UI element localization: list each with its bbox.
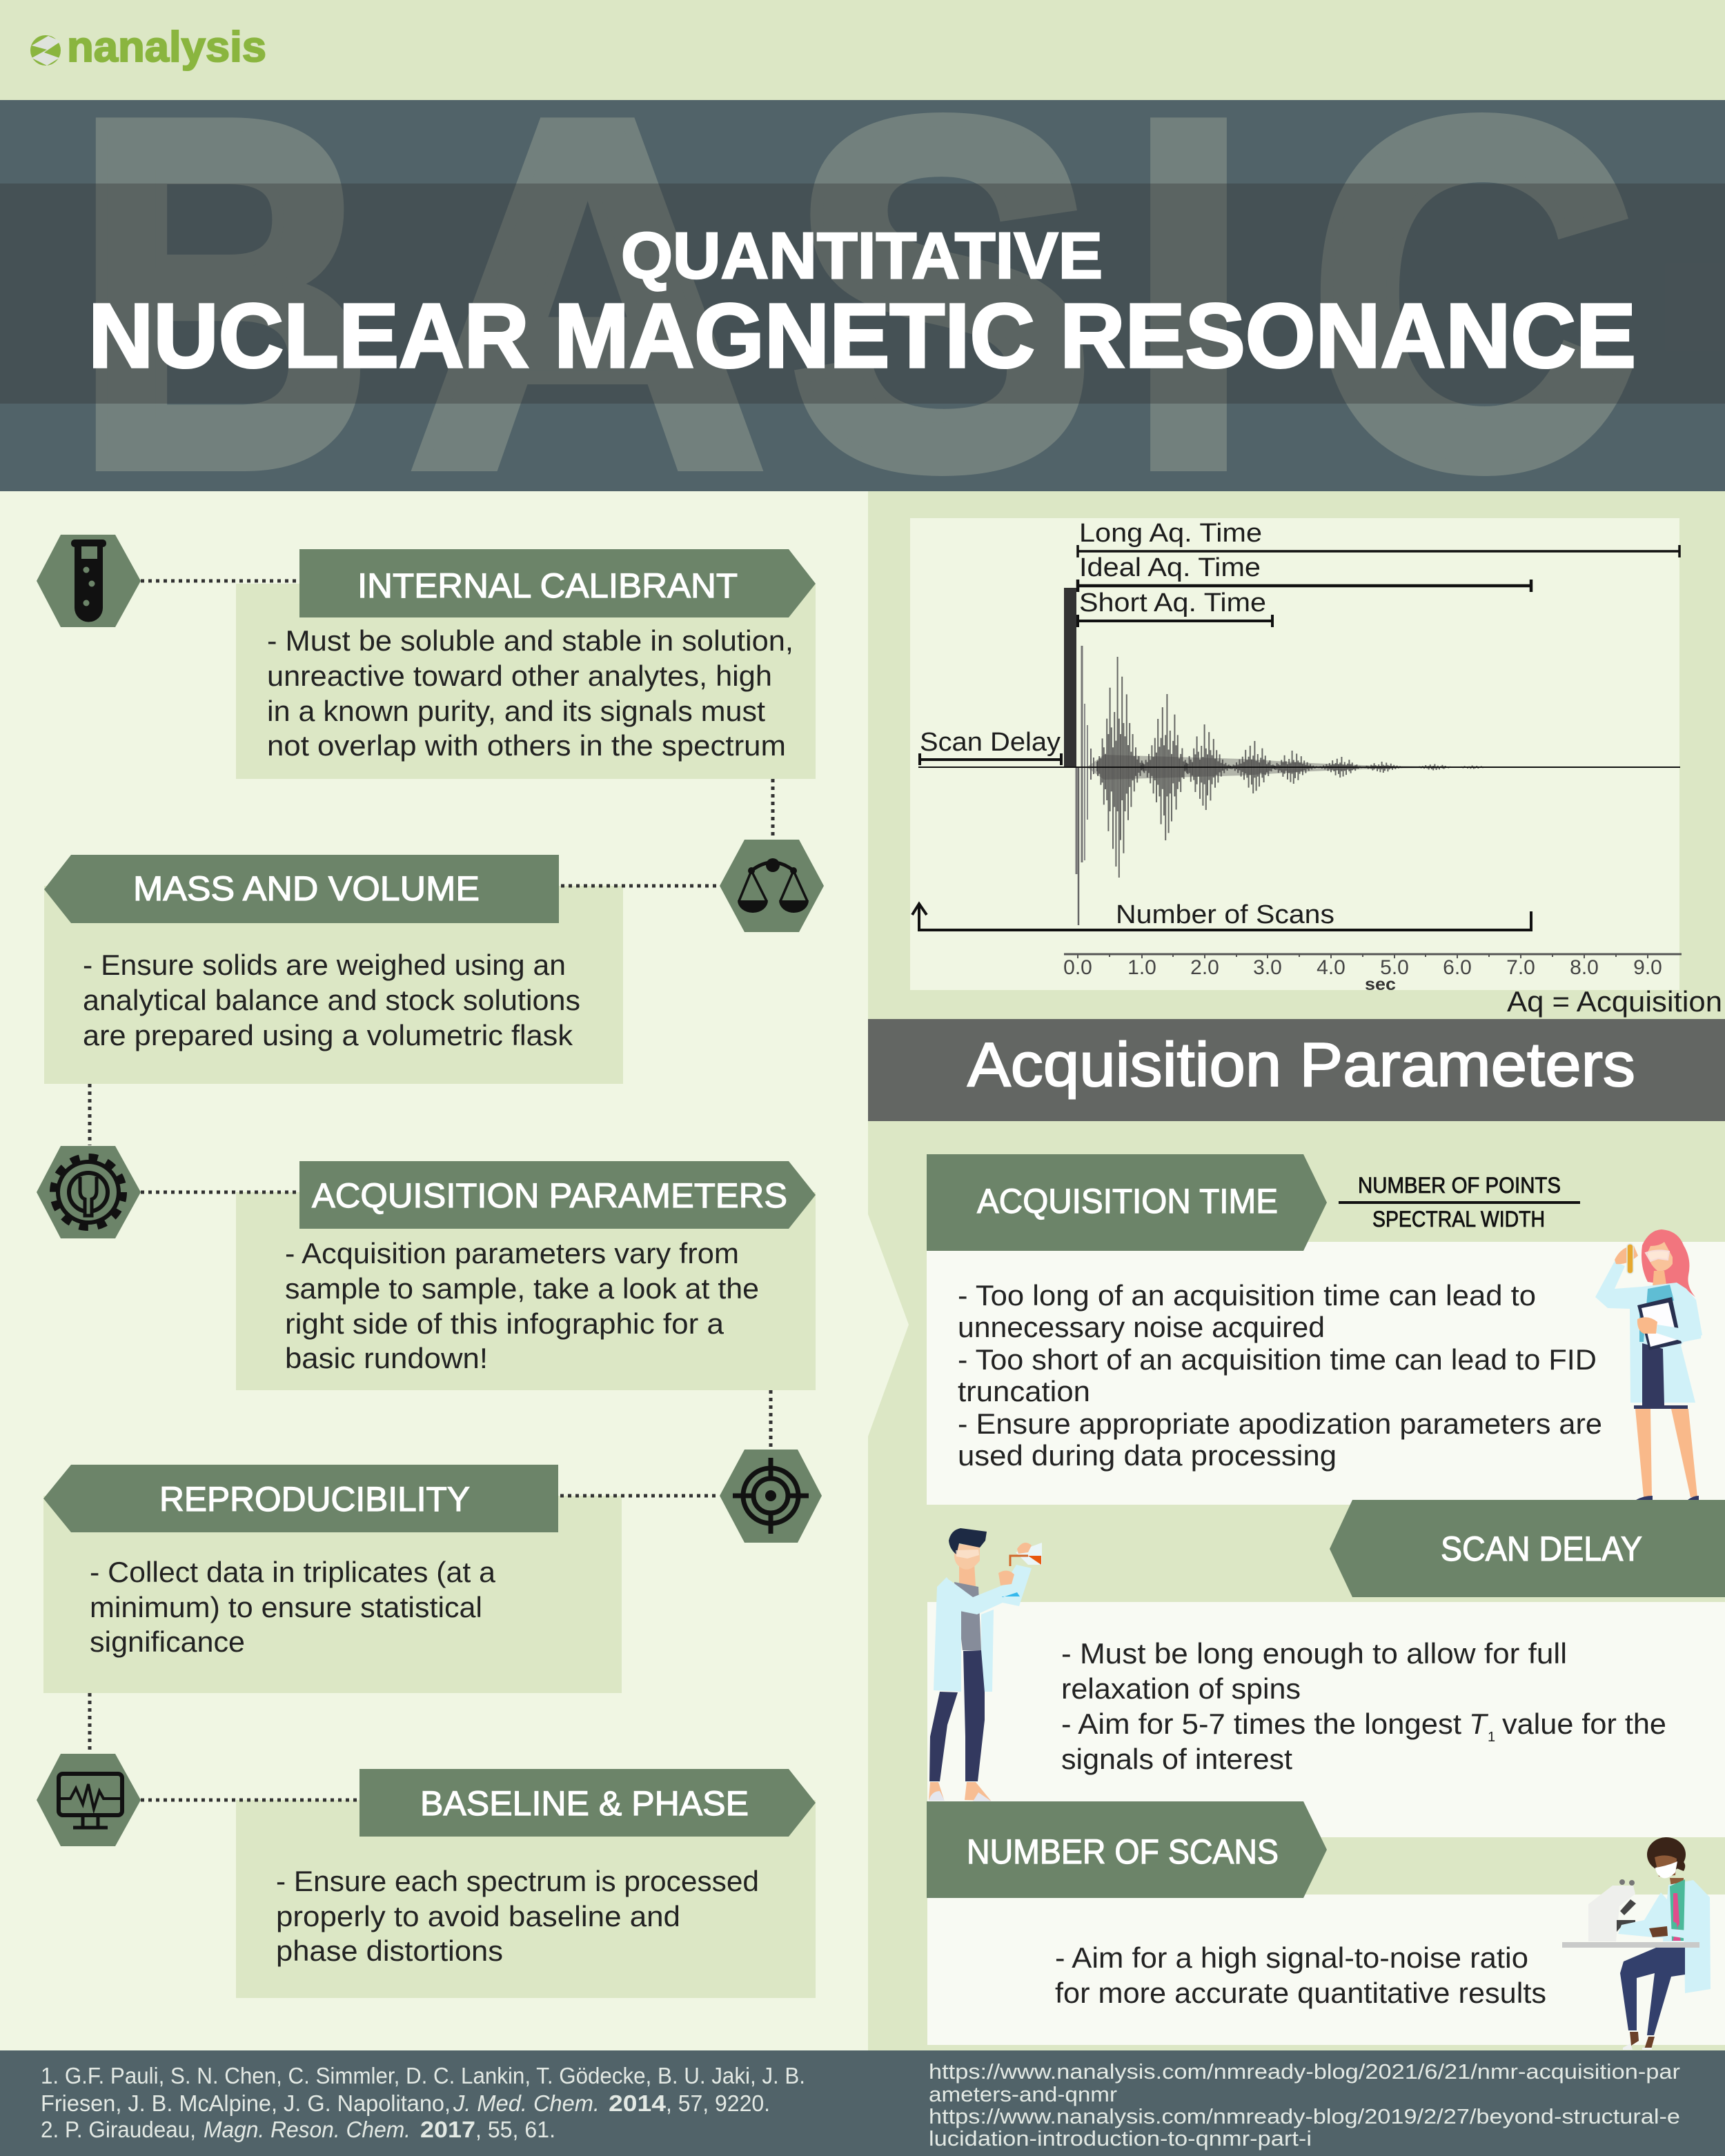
references: 2. P. Giraudeau, [41, 2117, 196, 2142]
text: scan delay [1061, 1637, 1666, 1775]
text: reproducibility: significance [90, 1625, 245, 1658]
banner: reproducibility: REPRODUCIBILITY [159, 1480, 470, 1519]
banner: number of scans [927, 1801, 1327, 1898]
time axis: 8.0 [1570, 956, 1599, 979]
source links: https://www.nanalysis.com/nmready-blog/2019/2/27/beyond-structural-e [929, 2104, 1680, 2128]
icon: target [720, 1450, 822, 1543]
text: scan delay: value for the [1502, 1708, 1666, 1740]
text: scan delay: signals of interest [1061, 1743, 1292, 1775]
section: baseline and phase [37, 1754, 816, 1998]
references: J. Med. Chem. [453, 2090, 600, 2116]
icon: test tube [37, 535, 141, 627]
chart: free induction decay [910, 518, 1682, 994]
background word: BASIC: I [1127, 17, 1250, 569]
references [41, 2063, 805, 2142]
references: 1. G.F. Pauli, S. N. Chen, C. Simmler, D. C. Lankin, T. Gödecke, B. U. Jaki, J. B. [41, 2063, 805, 2088]
section: acquisition parameters [37, 1146, 816, 1450]
icon: balance scale [720, 840, 824, 932]
text: acquisition time: used during data processing [958, 1439, 1337, 1472]
background word: BASIC: C [1308, 17, 1637, 569]
bracket: long acquisition time [1078, 519, 1679, 557]
section: internal calibrant [37, 535, 816, 840]
panel: scan delay [927, 1500, 1725, 1837]
references: , 55, 61. [475, 2117, 555, 2142]
formula: acquisition time: SPECTRAL WIDTH [1372, 1207, 1545, 1232]
illustration: woman with test tube [1595, 1229, 1702, 1500]
text: internal calibrant: unreactive toward other analytes, high [267, 660, 772, 692]
text: reproducibility: - Collect data in triplicates (at a [90, 1556, 496, 1588]
source links [929, 2059, 1680, 2150]
text: reproducibility [90, 1556, 496, 1658]
text: scan delay: 1 [1488, 1730, 1495, 1745]
icon: gear and wrench [37, 1146, 141, 1238]
text: acquisition time: - Too short of an acquisition time can lead to FID [958, 1343, 1597, 1376]
banner: scan delay [1330, 1500, 1725, 1597]
text: baseline and phase: - Ensure each spectrum is processed [276, 1865, 759, 1897]
references: 2014 [609, 2090, 667, 2116]
text: mass and volume: - Ensure solids are weighed using an [83, 949, 566, 981]
text: acquisition parameters: - Acquisition parameters vary from [285, 1237, 739, 1269]
text: number of scans: - Aim for a high signal-to-noise ratio [1055, 1941, 1528, 1974]
text: acquisition time: - Ensure appropriate apodization parameters are [958, 1407, 1602, 1440]
text: mass and volume [83, 949, 580, 1051]
time axis: 6.0 [1443, 956, 1472, 979]
bracket: long acquisition time: Long Aq. Time [1079, 519, 1262, 548]
text: baseline and phase: phase distortions [276, 1935, 503, 1967]
text: acquisition time: unnecessary noise acquired [958, 1311, 1325, 1343]
bracket: short acquisition time: Short Aq. Time [1079, 589, 1266, 617]
formula: acquisition time: NUMBER OF POINTS [1358, 1173, 1561, 1198]
title [88, 219, 1636, 386]
bracket: ideal acquisition time: Ideal Aq. Time [1079, 553, 1261, 582]
text: baseline and phase [276, 1865, 759, 1967]
footer [0, 2050, 1725, 2156]
banner: number of scans: NUMBER OF SCANS [967, 1832, 1279, 1871]
background word: BASIC [74, 17, 1637, 569]
text: internal calibrant: in a known purity, and its signals must [267, 695, 765, 727]
text: internal calibrant [267, 624, 793, 762]
banner: mass and volume: MASS AND VOLUME [133, 869, 480, 908]
text: internal calibrant: - Must be soluble and stable in solution, [267, 624, 793, 657]
icon: monitor with signal [37, 1754, 141, 1846]
time axis: 3.0 [1253, 956, 1282, 979]
text: scan delay: - Aim for 5-7 times the longest [1061, 1708, 1461, 1740]
heading: acquisition parameters: Acquisition Parameters [967, 1031, 1635, 1100]
banner: baseline and phase [359, 1769, 816, 1837]
time axis: 0.0 [1063, 956, 1092, 979]
source links: lucidation-introduction-to-qnmr-part-i [929, 2126, 1312, 2150]
background word: BASIC: B [74, 17, 373, 569]
text: mass and volume: are prepared using a volumetric flask [83, 1019, 573, 1051]
banner: acquisition parameters: ACQUISITION PARAMETERS [312, 1176, 787, 1215]
illustration: man pouring flask [929, 1528, 1042, 1801]
bracket: number of scans [912, 900, 1531, 930]
banner: scan delay: SCAN DELAY [1441, 1530, 1642, 1568]
banner: internal calibrant [299, 549, 816, 617]
text: internal calibrant: not overlap with others in the spectrum [267, 729, 786, 762]
text: mass and volume: analytical balance and stock solutions [83, 984, 580, 1016]
text: scan delay: T [1469, 1708, 1489, 1740]
text: acquisition parameters: sample to sample, take a look at the [285, 1272, 759, 1305]
bracket: short acquisition time [1078, 589, 1272, 627]
text: scan delay: relaxation of spins [1061, 1672, 1301, 1705]
time axis: 2.0 [1190, 956, 1219, 979]
time axis [1063, 954, 1682, 994]
logo: nanalysis: nanalysis [67, 23, 266, 71]
banner: acquisition parameters [299, 1161, 816, 1229]
bracket: scan delay: Scan Delay [920, 728, 1061, 757]
heading: acquisition parameters [868, 1019, 1725, 1121]
note: Aq abbreviation: Aq = Acquisition [1507, 985, 1722, 1018]
text: acquisition time: truncation [958, 1375, 1090, 1407]
time axis: 7.0 [1506, 956, 1535, 979]
text: acquisition parameters: right side of this infographic for a [285, 1307, 724, 1340]
text: number of scans [1055, 1941, 1546, 2009]
references: 2017 [420, 2117, 475, 2142]
title: NUCLEAR MAGNETIC RESONANCE [88, 285, 1636, 386]
banner: baseline and phase: BASELINE & PHASE [420, 1784, 749, 1823]
section: reproducibility [43, 1450, 822, 1752]
bracket: ideal acquisition time [1078, 553, 1531, 592]
source links: https://www.nanalysis.com/nmready-blog/2021/6/21/nmr-acquisition-par [929, 2059, 1680, 2084]
text: acquisition parameters [285, 1237, 759, 1374]
time axis: 9.0 [1633, 956, 1662, 979]
banner: acquisition time [927, 1154, 1327, 1251]
header banner [0, 17, 1725, 569]
time axis: 4.0 [1317, 956, 1346, 979]
time axis: 5.0 [1380, 956, 1409, 979]
time axis: sec [1365, 975, 1396, 994]
decay signal [918, 646, 1680, 925]
text: number of scans: for more accurate quantitative results [1055, 1977, 1546, 2009]
text: acquisition time: - Too long of an acquisition time can lead to [958, 1279, 1536, 1312]
source links: ameters-and-qnmr [929, 2082, 1117, 2106]
references: , 57, 9220. [666, 2090, 770, 2116]
title: QUANTITATIVE [621, 219, 1103, 293]
text: scan delay: - Must be long enough to allow for full [1061, 1637, 1567, 1670]
banner: reproducibility [43, 1465, 558, 1532]
background word: BASIC: S [789, 17, 1096, 569]
text: acquisition time [958, 1279, 1602, 1472]
banner: acquisition time: ACQUISITION TIME [977, 1182, 1278, 1220]
text: reproducibility: minimum) to ensure statistical [90, 1591, 482, 1623]
formula: acquisition time [1339, 1173, 1580, 1232]
text: acquisition parameters: basic rundown! [285, 1342, 488, 1374]
panel: acquisition time [927, 1154, 1725, 1505]
panel: number of scans [927, 1801, 1725, 2050]
illustration: researcher at microscope [1562, 1837, 1711, 2050]
logo band [0, 0, 1725, 100]
text: baseline and phase: properly to avoid baseline and [276, 1900, 680, 1932]
right column background [868, 491, 1725, 2050]
background word: BASIC: A [408, 17, 767, 569]
section: mass and volume [44, 840, 824, 1145]
references: Friesen, J. B. McAlpine, J. G. Napolitano, [41, 2090, 451, 2116]
references: Magn. Reson. Chem. [204, 2117, 411, 2142]
bracket: number of scans: Number of Scans [1116, 900, 1334, 929]
time axis: 1.0 [1127, 956, 1156, 979]
banner: mass and volume [44, 855, 559, 923]
pulse bar [1064, 588, 1076, 767]
banner: internal calibrant: INTERNAL CALIBRANT [357, 566, 738, 605]
